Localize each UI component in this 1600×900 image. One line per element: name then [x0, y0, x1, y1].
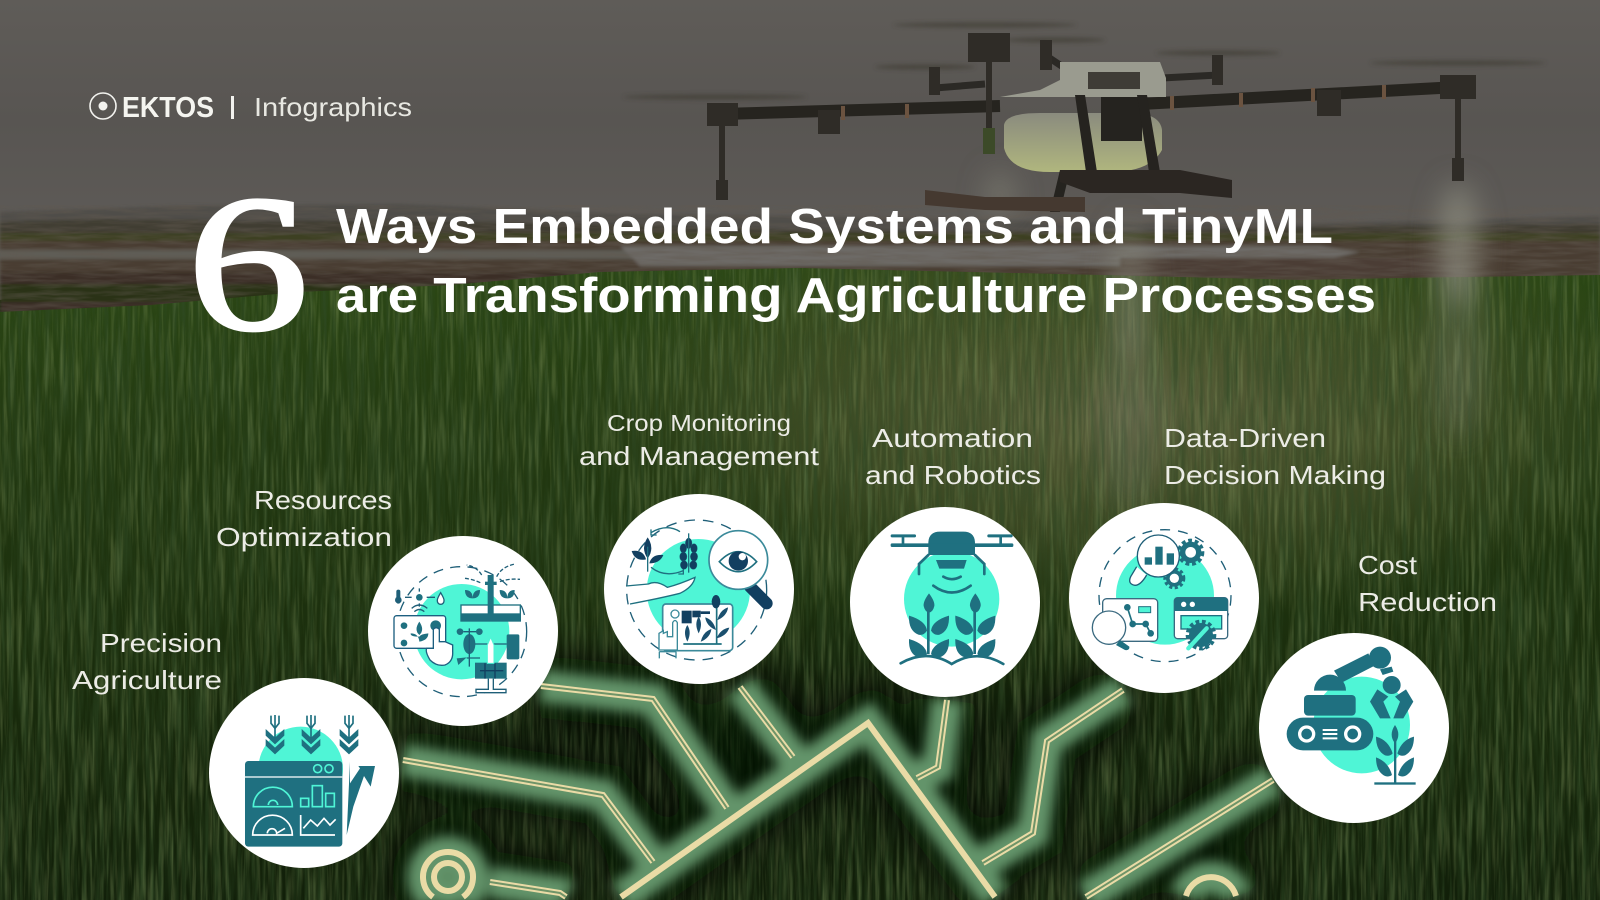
drone photo: [623, 22, 1546, 510]
label: Crop Monitoring and Management: Crop Monitoring: [607, 410, 791, 436]
icon: crop monitoring: [626, 520, 768, 660]
title: [187, 156, 1376, 372]
tank: [1004, 113, 1162, 172]
title line two: are Transforming Agriculture Processes: [336, 269, 1376, 323]
sky: [0, 0, 1600, 300]
label: Data-Driven Decision Making: Decision Making: [1164, 460, 1386, 490]
label: Cost Reduction: Cost: [1358, 550, 1418, 580]
icon: precision agriculture dashboard: [245, 715, 375, 847]
icon: resources optimization: [394, 564, 527, 697]
vent: [1088, 72, 1140, 89]
circuit traces with neon glow: [403, 686, 1273, 897]
rear arms: [935, 55, 1218, 88]
label: Resources Optimization: [216, 485, 392, 552]
logo mark: [90, 93, 116, 119]
label: Precision Agriculture: Agriculture: [72, 665, 222, 695]
rotor blades: [623, 22, 1546, 100]
white body: [1000, 62, 1166, 97]
label: Data-Driven Decision Making: Data-Driven: [1164, 423, 1326, 453]
motors and poles: [707, 33, 1476, 200]
label: Crop Monitoring and Management: and Management: [579, 441, 820, 471]
icon: data-driven decision making: [1092, 530, 1231, 662]
icon: cost reduction robot: [1287, 647, 1416, 785]
label: Resources Optimization: Resources: [254, 485, 392, 515]
label: Data-Driven Decision Making: [1164, 423, 1386, 490]
white icon discs: [209, 494, 1449, 868]
section name: Infographics: [254, 92, 412, 122]
horizon bands: [0, 204, 1600, 312]
front arms: [722, 106, 1000, 114]
label: Automation and Robotics: Automation: [872, 423, 1033, 453]
separator: [231, 96, 234, 119]
icon: automation drone: [891, 532, 1013, 664]
spray plumes: [986, 171, 1486, 510]
title line one: Ways Embedded Systems and TinyML: [336, 200, 1333, 254]
logo: [90, 92, 412, 124]
arm clamps: [843, 85, 1384, 120]
label: Cost Reduction: [1358, 550, 1497, 617]
logo wordmark: EKTOS: [122, 92, 214, 124]
label: Automation and Robotics: and Robotics: [865, 460, 1041, 490]
grass: [0, 268, 1600, 900]
label: Resources Optimization: Optimization: [216, 522, 392, 552]
battery and struts: [1050, 95, 1160, 212]
label: Crop Monitoring and Management: [579, 410, 820, 471]
label: Automation and Robotics: [865, 423, 1041, 490]
label: Precision Agriculture: Precision: [100, 628, 222, 658]
label: Cost Reduction: Reduction: [1358, 587, 1497, 617]
big numeral: 6: [187, 156, 309, 372]
label: Precision Agriculture: [72, 628, 222, 695]
landing skids: [1060, 170, 1232, 198]
